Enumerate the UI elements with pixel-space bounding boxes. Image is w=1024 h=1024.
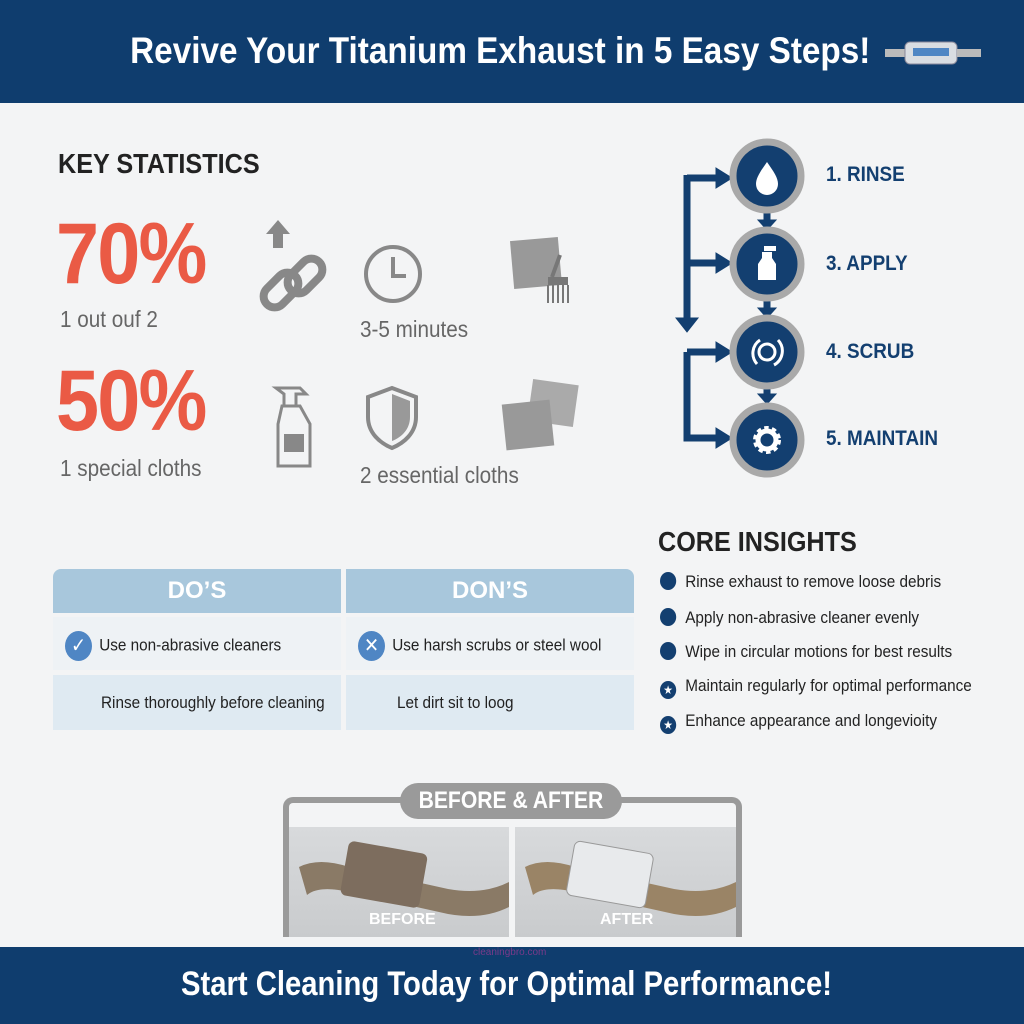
footer text: Start Cleaning Today for Optimal Performance! — [181, 965, 831, 1003]
heading: core insights: CORE INSIGHTS — [658, 526, 857, 557]
stat: 70%: 70% — [56, 206, 206, 302]
flowchart: steps — [675, 138, 938, 478]
icon: cloth and brush — [510, 237, 569, 303]
list: core insights: Rinse exhaust to remove loose debris — [685, 572, 941, 591]
icon: clock — [364, 245, 422, 303]
list: core insights: Wipe in circular motions for best results — [685, 642, 952, 661]
text: 2 essential cloths: 2 essential cloths — [360, 462, 519, 488]
table: do's and don'ts: DO’S — [168, 577, 226, 604]
heading: key statistics: KEY STATISTICS — [58, 148, 260, 179]
flowchart: steps: 3. APPLY — [826, 252, 908, 275]
panel: before & after — [283, 783, 742, 937]
list: core insights: ★ — [663, 683, 673, 697]
image: after — [515, 827, 736, 937]
label: before & after — [400, 783, 622, 819]
image: before — [289, 827, 509, 937]
text: 3-5 minutes: 3-5 minutes — [360, 316, 468, 342]
table: do's and don'ts — [53, 569, 634, 730]
step labels: 1. RINSE — [826, 163, 905, 186]
image: after: AFTER — [600, 911, 653, 928]
table: do's and don'ts: Rinse thoroughly before cleaning — [101, 693, 325, 712]
table: do's and don'ts: Use non-abrasive cleaners — [99, 635, 281, 654]
watermark: cleaningbro.com — [473, 947, 546, 958]
stat: 50%: 50% — [56, 353, 206, 449]
flowchart: steps: 5. MAINTAIN — [826, 427, 938, 450]
stat: 70%: 1 out ouf 2 — [60, 306, 158, 332]
table: do's and don'ts: DON’S — [452, 577, 528, 604]
title: Revive Your Titanium Exhaust in 5 Easy Steps! — [130, 30, 870, 71]
flowchart: steps: 4. SCRUB — [826, 340, 914, 363]
icon: cloths — [502, 379, 579, 450]
list: core insights — [660, 572, 972, 734]
stat: 50%: 1 special cloths — [60, 455, 202, 481]
icon: chain with arrow — [260, 220, 326, 312]
table: do's and don'ts: Use harsh scrubs or steel wool — [392, 635, 601, 654]
icon: spray bottle — [272, 386, 312, 468]
table: do's and don'ts: ✓ — [71, 635, 86, 657]
list: core insights: ★ — [663, 718, 673, 732]
footer banner — [0, 947, 1024, 1024]
header banner — [0, 0, 1024, 103]
list: core insights: Enhance appearance and longevioity — [685, 711, 937, 730]
table: do's and don'ts: Let dirt sit to loog — [397, 693, 514, 712]
table: do's and don'ts: ✕ — [364, 635, 379, 657]
label: before & after: BEFORE & AFTER — [419, 787, 603, 814]
image: before: BEFORE — [369, 911, 436, 928]
icon: shield — [366, 386, 418, 450]
list: core insights: Maintain regularly for optimal performance — [685, 676, 972, 695]
list: core insights: Apply non-abrasive cleaner evenly — [685, 608, 919, 627]
icon: exhaust — [885, 42, 981, 64]
